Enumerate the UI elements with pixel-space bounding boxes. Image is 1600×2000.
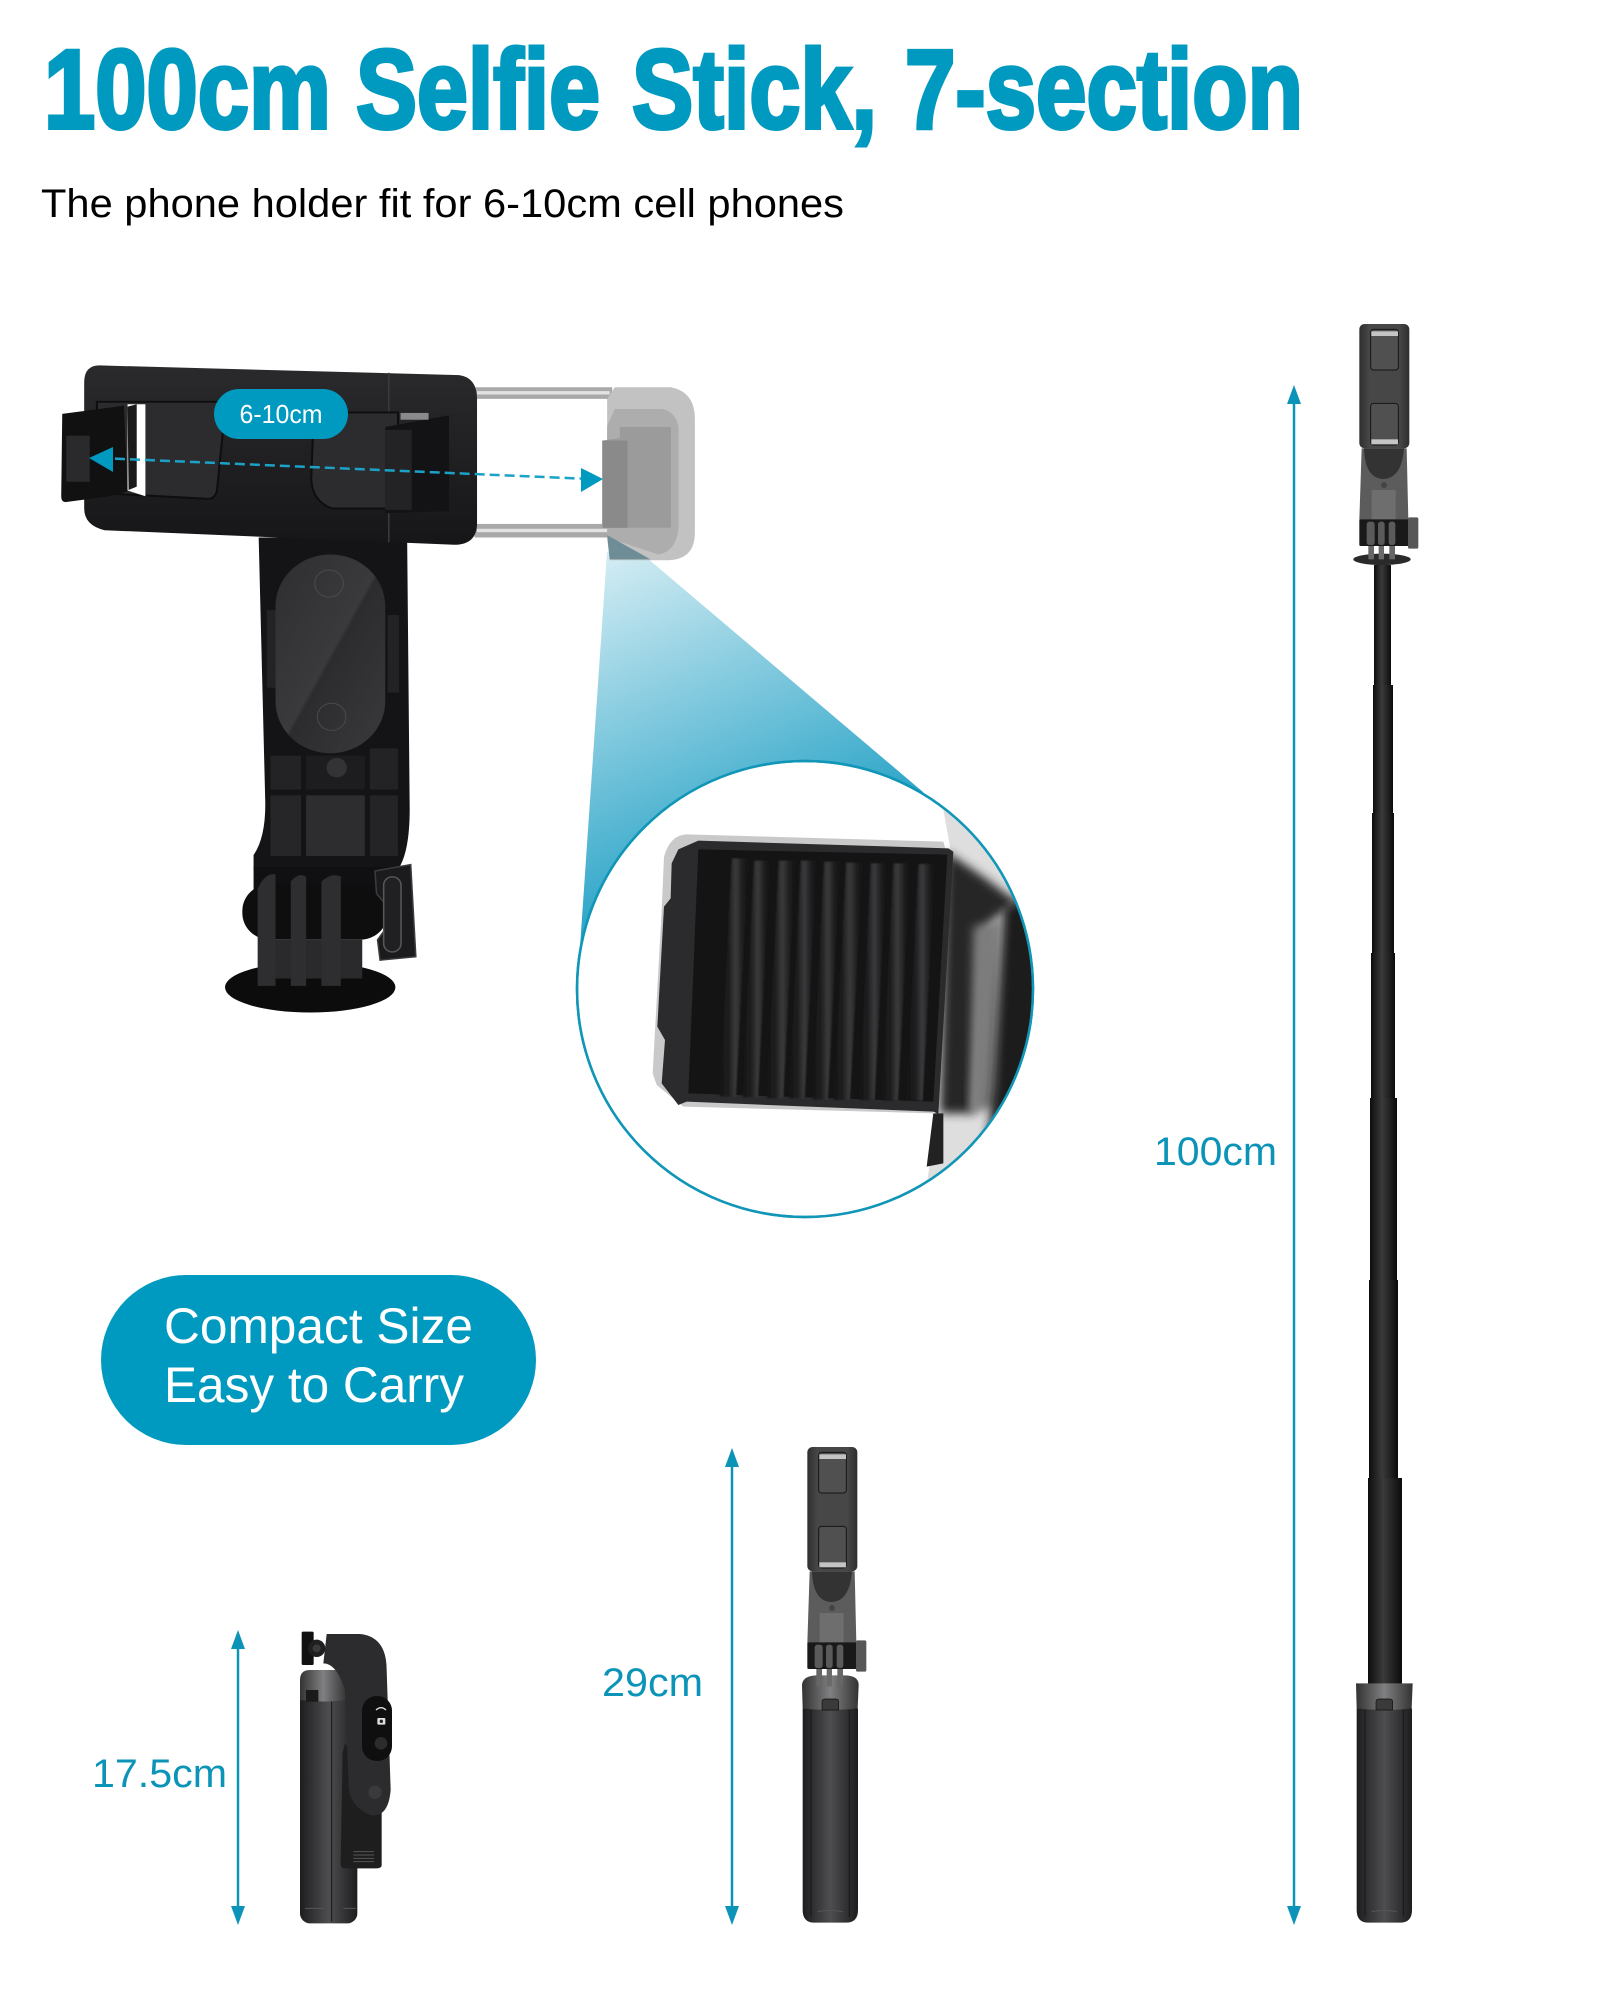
dimension 29cm bbox=[602, 1448, 739, 1925]
dimension 17.5cm: 17.5cm bbox=[92, 1752, 227, 1796]
compact size badge: Easy to Carry bbox=[164, 1357, 464, 1413]
title: 100cm bbox=[44, 27, 331, 152]
rubber pad frame bbox=[657, 841, 953, 1114]
magnifier cone bbox=[580, 552, 1000, 1000]
title: Selfie bbox=[356, 27, 600, 152]
dimension 100cm bbox=[1154, 385, 1301, 1925]
zoom circle detail bbox=[577, 761, 1050, 1217]
title bbox=[44, 27, 1303, 152]
holder body bbox=[61, 365, 477, 545]
title: Stick, bbox=[632, 27, 877, 152]
width arrow bbox=[89, 447, 603, 492]
handle bbox=[300, 1670, 357, 1923]
dimension 100cm: 100cm bbox=[1154, 1130, 1277, 1174]
screw bbox=[327, 758, 347, 777]
remote grip bbox=[302, 1632, 391, 1815]
head bbox=[807, 1447, 866, 1686]
stem bbox=[254, 538, 410, 870]
dimension 29cm: 29cm bbox=[602, 1661, 703, 1705]
head bbox=[1353, 324, 1418, 565]
title: 7-section bbox=[905, 27, 1303, 152]
phone holder bbox=[61, 365, 695, 1013]
half extended stick bbox=[802, 1447, 866, 1923]
mount joint bbox=[225, 865, 416, 1013]
handle bbox=[802, 1675, 859, 1923]
width pill: 6-10cm bbox=[240, 399, 322, 429]
folded stick bbox=[300, 1632, 392, 1923]
belt clip bbox=[341, 1743, 382, 1868]
swivel plate bbox=[276, 554, 385, 753]
fully extended stick bbox=[1353, 324, 1418, 1923]
remote buttons bbox=[362, 1696, 392, 1761]
handle bbox=[1356, 1683, 1413, 1923]
compact size badge: Compact Size bbox=[164, 1298, 473, 1354]
gray extended clamp bbox=[474, 387, 695, 560]
rubber ribs bbox=[720, 858, 935, 1101]
compact size badge bbox=[101, 1275, 536, 1445]
telescopic tube bbox=[1368, 565, 1402, 1688]
dimension 17.5cm bbox=[92, 1630, 245, 1925]
subtitle: The phone holder fit for 6-10cm cell phones bbox=[41, 182, 844, 226]
silver pad outline bbox=[653, 834, 947, 1113]
width pill bbox=[214, 389, 348, 439]
